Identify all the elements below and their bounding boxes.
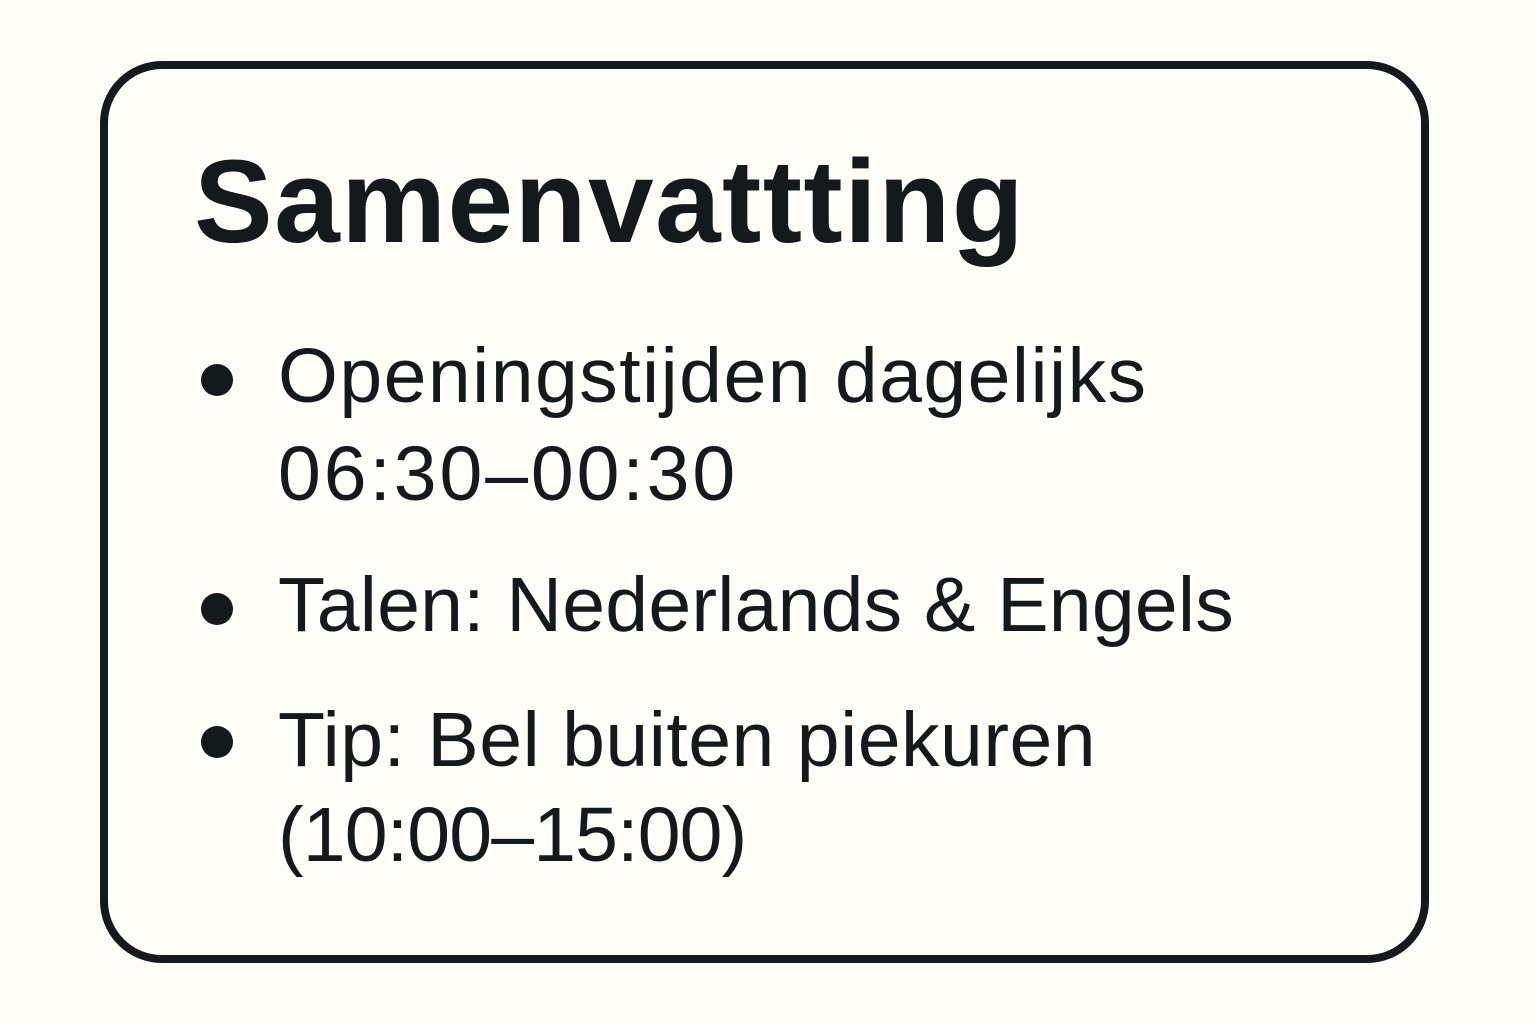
bullet icon: languages — [201, 593, 233, 625]
text block: tip: Tip: Bel buiten piekuren — [278, 697, 1096, 783]
text block: tip — [278, 697, 1096, 878]
bullet icon: tip — [201, 726, 233, 758]
text block: opening hours: Openingstijden dagelijks — [278, 333, 1148, 419]
text block: tip: (10:00–15:00) — [278, 792, 746, 878]
text block: opening hours — [278, 333, 1148, 517]
panel: summary card — [100, 61, 1429, 963]
text block: languages: Talen: Nederlands & Engels — [278, 562, 1234, 648]
title: Samenvattting — [194, 136, 1025, 268]
text block: opening hours: 06:30–00:30 — [278, 431, 738, 517]
bullet icon: opening hours — [201, 364, 233, 396]
